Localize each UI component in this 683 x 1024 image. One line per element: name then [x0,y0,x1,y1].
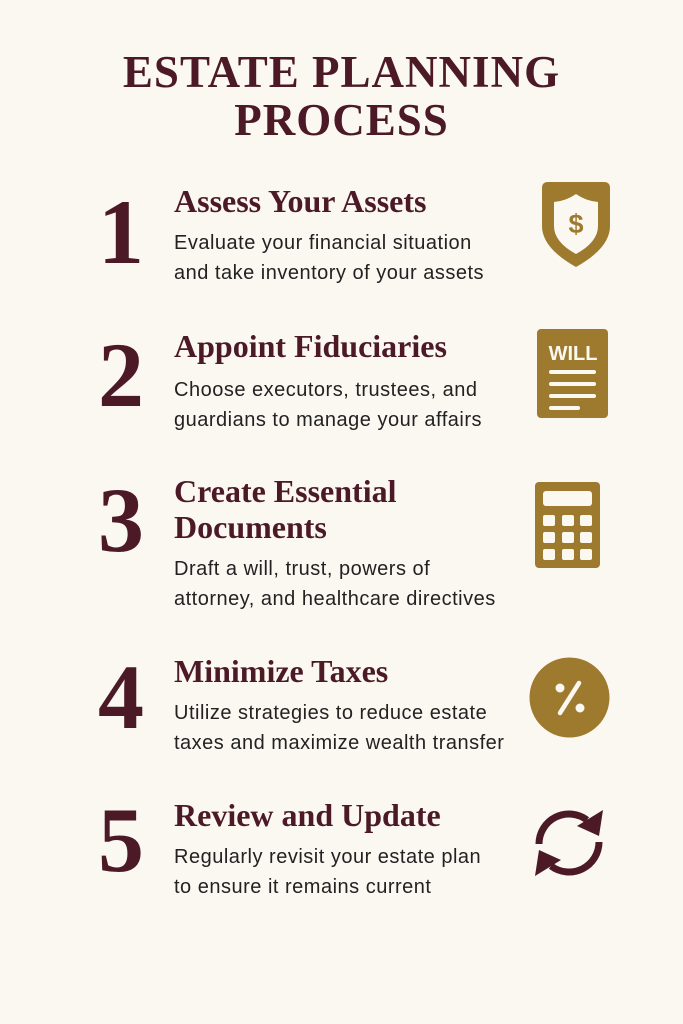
body 4: taxes and maximize wealth transfer [174,732,504,754]
number 5: 5 [98,789,144,891]
body 2: guardians to manage your affairs [174,409,482,431]
step 4 [98,646,610,754]
body 5: to ensure it remains current [174,876,431,898]
body 3: Draft a will, trust, powers of [174,558,430,580]
body 2 [174,379,482,431]
body 2: Choose executors, trustees, and [174,379,477,401]
body 1: and take inventory of your assets [174,262,484,284]
heading 3 [174,473,396,545]
body 3: attorney, and healthcare directives [174,588,496,610]
icon: will document: WILL [549,343,597,365]
icon: shield dollar: $ [568,209,584,239]
body 5 [174,846,481,898]
heading 3: Documents [174,509,327,545]
number 4: 4 [98,646,144,748]
body 4 [174,702,504,754]
body 1 [174,232,484,284]
number 1: 1 [98,181,144,283]
body 1: Evaluate your financial situation [174,232,472,254]
heading 4: Minimize Taxes [174,653,388,689]
step 1 [98,181,610,284]
icon: shield dollar [542,182,610,267]
heading 1: Assess Your Assets [174,183,426,219]
icon: percent [530,658,610,738]
heading 5: Review and Update [174,797,441,833]
body 5: Regularly revisit your estate plan [174,846,481,868]
number 2: 2 [98,324,144,426]
icon: calculator [535,482,600,568]
number 3: 3 [98,469,144,571]
icon: refresh arrows [535,810,603,876]
step 5 [98,789,603,898]
title: ESTATE PLANNING [123,47,560,97]
title: PROCESS [234,95,449,145]
icon: will document [537,329,608,418]
step 2 [98,324,608,431]
body 3 [174,558,496,610]
title [123,47,560,145]
step 3 [98,469,600,610]
heading 2: Appoint Fiduciaries [174,328,447,364]
body 4: Utilize strategies to reduce estate [174,702,487,724]
heading 3: Create Essential [174,473,396,509]
